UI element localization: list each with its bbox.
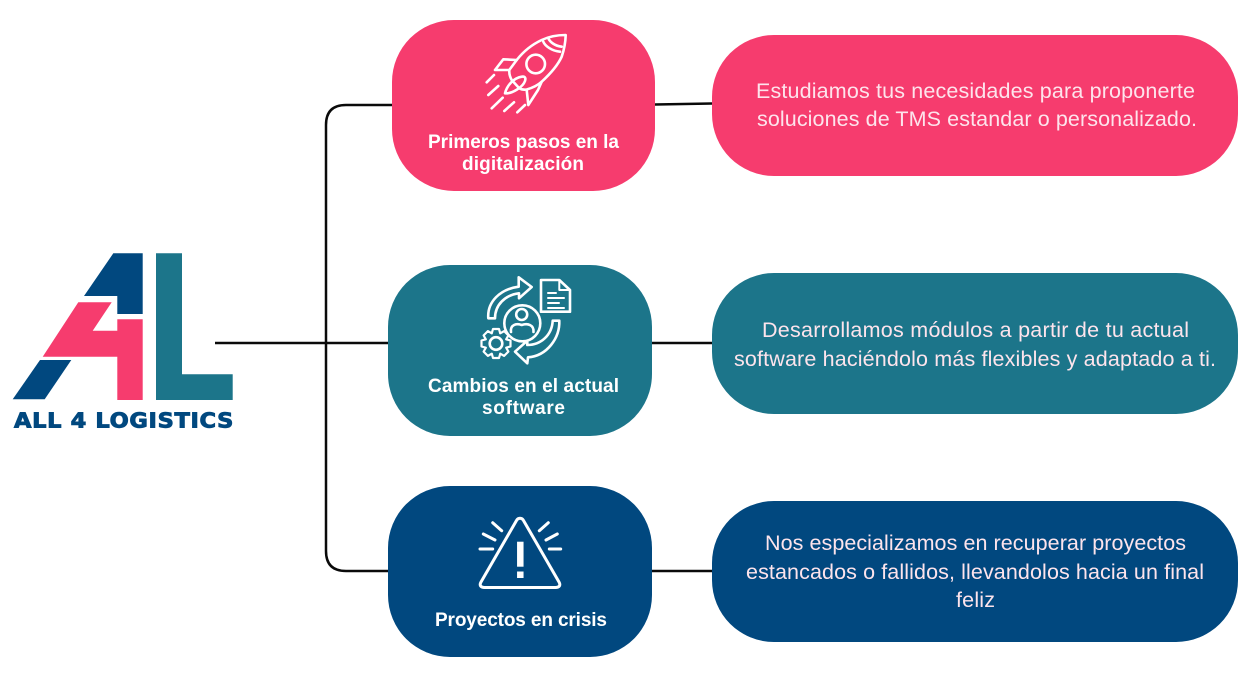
icon: rocket	[487, 35, 566, 112]
panel: proyectos en crisis description: Nos especializamos en recuperar proyectos	[765, 531, 1186, 555]
panel: primeros pasos	[392, 20, 655, 191]
logo: All 4 Logistics	[13, 253, 234, 432]
panel: proyectos en crisis description	[712, 501, 1238, 642]
label: software	[482, 398, 565, 419]
label	[428, 376, 619, 419]
connector lines	[215, 104, 712, 571]
panel: cambios description: Desarrollamos módulos a partir de tu actual	[762, 318, 1189, 342]
label: Cambios en el actual	[428, 376, 619, 397]
panel: proyectos en crisis description: estancados o fallidos, llevandolos hacia un final	[746, 560, 1204, 584]
icon: warning triangle	[480, 518, 561, 588]
label: Proyectos en crisis	[435, 610, 607, 631]
logo: All 4 Logistics: ALL 4 LOGISTICS	[14, 408, 234, 432]
label: digitalización	[462, 154, 584, 175]
panel: primeros pasos description: Estudiamos tus necesidades para proponerte	[756, 79, 1195, 103]
panel: proyectos en crisis description: feliz	[956, 588, 995, 612]
panel: proyectos en crisis	[388, 486, 652, 657]
panel: primeros pasos description	[712, 35, 1238, 176]
panel: cambios description	[712, 273, 1238, 414]
label: Primeros pasos en la	[428, 132, 619, 153]
icon: software change cycle	[482, 277, 570, 363]
panel: primeros pasos description: soluciones de TMS estandar o personalizado.	[757, 107, 1197, 131]
panel: cambios	[388, 265, 652, 436]
label	[428, 132, 619, 175]
panel: cambios description: software haciéndolo más flexibles y adaptado a ti.	[734, 347, 1216, 371]
